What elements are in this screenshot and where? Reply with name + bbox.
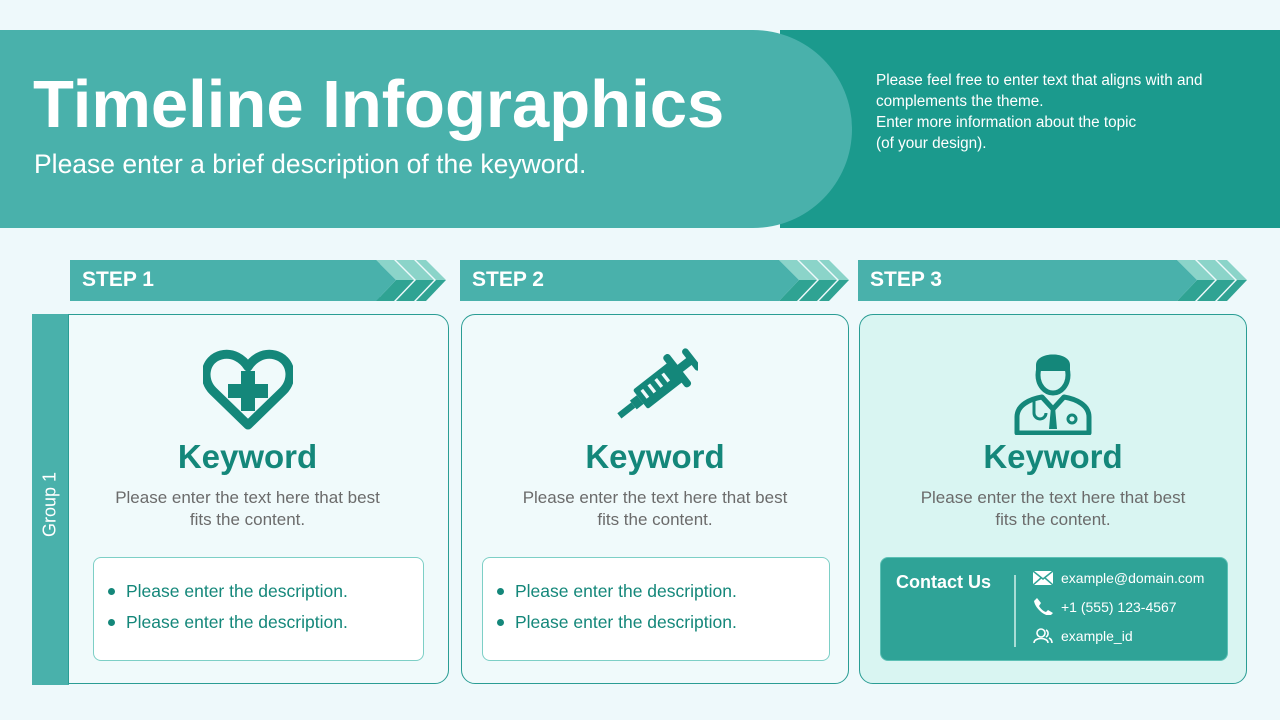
description 3: fits the content. (995, 510, 1111, 529)
header note (876, 72, 1203, 152)
header note: Enter more information about the topic (876, 114, 1136, 131)
description 2 (523, 488, 788, 529)
contact box (880, 557, 1228, 661)
icon: heart with cross (203, 350, 293, 430)
bullet box 2: Please enter the description. (515, 612, 737, 632)
keyword 2: Keyword (585, 438, 725, 475)
card 2 (461, 314, 849, 684)
step 2 bar: STEP 2 (472, 268, 544, 291)
step 3 bar (858, 260, 1247, 301)
description 3: Please enter the text here that best (921, 488, 1185, 507)
contact details (1033, 570, 1204, 644)
subtitle: Please enter a brief description of the keyword. (34, 149, 586, 179)
contact details: example@domain.com (1061, 570, 1204, 586)
header note: Please feel free to enter text that aligns with and complements the theme. (876, 72, 1203, 110)
description 3 (921, 488, 1186, 529)
contact details: +1 (555) 123-4567 (1061, 599, 1177, 615)
bullet box 1: Please enter the description. (126, 612, 348, 632)
description 2: Please enter the text here that best (523, 488, 787, 507)
keyword 3: Keyword (983, 438, 1123, 475)
icon: syringe (617, 348, 698, 418)
description 1: Please enter the text here that best (115, 488, 380, 507)
bullet box 2 (482, 557, 830, 661)
bullet box 1 (93, 557, 424, 661)
card 1 (68, 314, 449, 684)
keyword 1: Keyword (178, 438, 317, 475)
step 3 bar: STEP 3 (870, 268, 942, 291)
group label band: Group 1 (40, 472, 60, 537)
contact heading: Contact Us (896, 572, 991, 592)
contact details: example_id (1061, 628, 1133, 644)
bullet box 2: Please enter the description. (515, 581, 737, 601)
header band (0, 30, 1280, 228)
step 1 bar (70, 260, 446, 301)
step 1 bar: STEP 1 (82, 268, 154, 291)
icon: doctor (1014, 354, 1092, 435)
header note: (of your design). (876, 135, 987, 152)
bullet box 1: Please enter the description. (126, 581, 348, 601)
description 2: fits the content. (597, 510, 713, 529)
description 1: fits the content. (190, 510, 305, 529)
title: Timeline Infographics (33, 67, 724, 142)
description 1 (115, 488, 380, 529)
card 3 (859, 314, 1247, 684)
group label band (32, 314, 69, 685)
step 2 bar (460, 260, 849, 301)
